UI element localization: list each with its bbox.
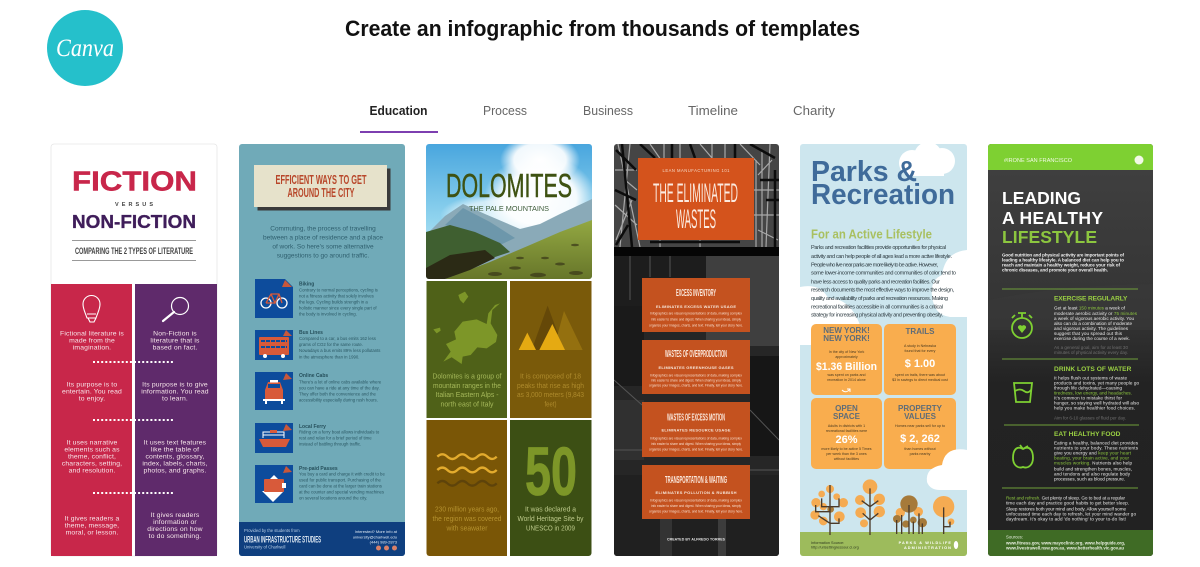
item: biking: the legs. Cycling builds strength in a xyxy=(299,300,368,304)
section: eat healthy food: EAT HEALTHY FOOD xyxy=(1054,431,1121,438)
stat card: new york: was spent on parks and xyxy=(828,373,865,377)
section: exercise regularly: Get at least 150 minutes a week of xyxy=(1054,306,1126,310)
card: wastes of excess motion: WASTES OF EXCESS MOTION xyxy=(667,412,725,424)
item: pre-paid passes: used for public transport. Purchasing of the xyxy=(299,478,382,482)
section: drink lots of water: It helps flush out systems of waste xyxy=(1054,376,1127,380)
section: exercise regularly: suggest that you spread out this xyxy=(1054,331,1123,336)
card: excess inventory xyxy=(642,278,750,332)
item: pre-paid passes xyxy=(255,465,385,503)
text: non-fiction column: to learn. xyxy=(162,396,188,402)
section: exercise regularly: and vigorous activity. The guidelines xyxy=(1054,326,1129,331)
text: fiction column: Fictional literature is xyxy=(60,330,124,338)
tile: mountain peaks: peaks that rise as high xyxy=(517,381,584,390)
item: online cabs xyxy=(255,372,382,410)
item: bus lines: in the atmosphere than in 1990. xyxy=(299,354,359,360)
body text: Parks and recreation facilities provide opportunities for physical xyxy=(811,245,946,251)
closing paragraph: unfocussed time each day to refresh, let your mind wander go xyxy=(1006,512,1136,516)
body text: some lower-income communities and communities of color tend to xyxy=(811,271,956,277)
stat card: open space: per week than the 3 ones xyxy=(826,452,867,456)
body text: research documents the most effective ways to improve the design, xyxy=(811,288,954,294)
footer: Provided by the students from xyxy=(244,528,300,533)
stat card: open space: without facilities xyxy=(834,457,859,461)
text: non-fiction column: information. You read xyxy=(141,388,209,396)
tile: fifty years: 50 xyxy=(525,433,577,510)
item: online cabs: Online Cabs xyxy=(299,373,328,379)
panel: the eliminated wastes: THE ELIMINATED xyxy=(653,178,738,208)
banner heading xyxy=(254,165,390,210)
stat card: trails: $3 in savings to direct medical cost xyxy=(892,378,948,382)
intro text: Commuting, the process of travelling xyxy=(270,226,376,232)
intro text: suggestions to go around traffic. xyxy=(277,252,369,260)
panel: leading a healthy lifestyle xyxy=(988,144,1153,556)
subheading: For an Active Lifestyle xyxy=(811,226,932,242)
location label: #IRONE SAN FRANCISCO xyxy=(1004,158,1073,164)
section: drink lots of water: tiredness, low energy, and headaches. xyxy=(1054,390,1132,396)
stat card: trails: spent on trails, there was about xyxy=(895,373,945,377)
item: pre-paid passes: Pre-paid Passes xyxy=(299,466,338,472)
card: wastes of excess motion: Infographics are visual representations of data, making complex xyxy=(650,436,742,440)
section: exercise regularly: moderate aerobic activity or 75 minutes xyxy=(1054,311,1138,316)
intro paragraph xyxy=(1002,252,1124,272)
closing paragraph: daydream. It's okay to add 'do nothing' to your to-do list! xyxy=(1006,516,1126,522)
card: wastes of excess motion: info easier to share and digest. When sharing your ideas, simply xyxy=(651,442,741,446)
item: bus lines: grams of CO2 for the same route. xyxy=(299,342,363,347)
card: transportation and waiting: TRANSPORTATION & WAITING xyxy=(665,475,727,486)
item: pre-paid passes: at the counter and special vending machines xyxy=(299,490,384,494)
header bar xyxy=(988,144,1153,170)
card: wastes of excess motion xyxy=(642,402,750,457)
stat card: property values: than homes without xyxy=(904,447,936,451)
tile: seawater waves: with seawater xyxy=(446,524,488,532)
item: local ferry: instead of battling through traffic. xyxy=(299,442,361,446)
card: excess inventory: organize your images, charts, and text. Finally, tell your story here. xyxy=(649,324,743,328)
text: non-fiction column: Its purpose is to give xyxy=(142,382,208,388)
panel: parks and recreation: Recreation xyxy=(811,179,955,211)
text: non-fiction column: index, labels, charts, xyxy=(142,460,208,468)
heading: A HEALTHY xyxy=(1002,208,1103,228)
tile: mountain peaks: feet) xyxy=(544,400,557,408)
item: online cabs: There's a lot of online cabs available where xyxy=(299,380,382,384)
header block: WASTES xyxy=(676,204,716,234)
closing paragraph: Sleep restores both your mind and body. Allow yourself some xyxy=(1006,506,1126,512)
section: eat healthy food: give you energy and keep your heart xyxy=(1054,450,1132,456)
text: non-fiction column: photos, and graphs. xyxy=(144,468,206,474)
cloud: top right xyxy=(899,142,955,176)
header block: LEAN MANUFACTURING 101 xyxy=(662,168,730,173)
text: fiction column: It uses narrative xyxy=(67,440,118,446)
footer bar xyxy=(988,530,1153,556)
panel: efficient ways to get around the city xyxy=(239,144,405,556)
section: eat healthy food: muscles working. Nutrients also help xyxy=(1054,460,1132,466)
administration label: PARKS & WILDLIFE xyxy=(899,541,952,545)
stat card: open space: Adults in districts with 1 xyxy=(828,424,865,428)
stat card: property values: $ 2, 262 xyxy=(900,433,940,445)
panel: the eliminated wastes xyxy=(614,144,779,556)
footer: (444) 989-2873 xyxy=(370,540,398,544)
stat card: new york: In the city of New York xyxy=(829,350,864,354)
intro paragraph: Good nutrition and physical activity are important points of xyxy=(1002,252,1124,258)
card: transportation and waiting: Infographics are visual representations of data, making complex xyxy=(650,498,742,502)
section: drink lots of water: Aim for 6-10 glasses of fluid per day. xyxy=(1054,416,1126,420)
heading: LEADING xyxy=(1002,188,1081,208)
item: online cabs: you can have a ride at any time of the day. xyxy=(299,386,380,390)
logo: Canva: Canva xyxy=(56,35,114,62)
text: non-fiction column: like the table of xyxy=(151,446,199,454)
tile: map of europe: Dolomites is a group of xyxy=(432,372,502,380)
tile: fifty years: It was declared a xyxy=(525,504,577,514)
body text: People who live near parks are more likely to be active. However, xyxy=(811,262,938,268)
stat card: open space: more likely to be active 5 Times xyxy=(821,447,872,451)
card: wastes of excess motion: ELIMINATES RESOURCE USAGE xyxy=(662,428,731,432)
section: eat healthy food: processes, such as blood pressure. xyxy=(1054,476,1125,482)
text: non-fiction column: It uses text features xyxy=(144,440,207,446)
item: local ferry: rest and relax for a brief period of time xyxy=(299,436,372,440)
section: drink lots of water: help you make healthier food choices. xyxy=(1054,406,1135,410)
stat card: trails xyxy=(884,324,956,395)
section: eat healthy food xyxy=(1013,431,1139,482)
icon: apple xyxy=(1013,445,1033,468)
credit: CREATED BY ALFREDO TORRES xyxy=(667,538,726,542)
icon: light bulb xyxy=(83,296,100,322)
intro text: between a place of residence and a place xyxy=(263,234,383,242)
section: drink lots of water: DRINK LOTS OF WATER xyxy=(1054,366,1132,373)
intro text: of work. So here's some alternative xyxy=(272,244,374,250)
heading: LIFESTYLE xyxy=(1002,227,1097,247)
cloud: right xyxy=(932,250,967,317)
item: biking: not a fitness activity that solely involves xyxy=(299,294,374,298)
card: wastes of overproduction: Infographics are visual representations of data, making complex xyxy=(650,374,742,378)
versus label: VERSUS xyxy=(115,202,153,208)
tile: fifty years: World Heritage Site by xyxy=(518,514,584,523)
text: fiction column: to enjoy. xyxy=(79,396,105,402)
heading: Parks & xyxy=(811,156,917,188)
icon: glass of water xyxy=(1014,383,1032,402)
text: non-fiction column: based on fact. xyxy=(153,344,197,352)
subheading: THE PALE MOUNTAINS xyxy=(469,204,549,213)
stat card: new york: $1.36 Billion xyxy=(816,361,877,373)
item: bus lines: Compared to a car, a bus emits 162 less xyxy=(299,336,376,341)
stat card: open space: SPACE xyxy=(833,412,861,421)
body text: quality and availability of parks and recreation resources. Making xyxy=(811,296,948,302)
text: fiction column: It gives readers a xyxy=(65,516,119,522)
administration label xyxy=(899,541,958,550)
text: non-fiction column xyxy=(141,330,209,540)
card: transportation and waiting: organize your images, charts, and text. Finally, tell your story here. xyxy=(649,510,743,514)
section: exercise regularly: a week of vigorous aerobic activity. You xyxy=(1054,316,1134,321)
section: exercise regularly: EXERCISE REGULARLY xyxy=(1054,296,1128,303)
closing paragraph: time each day and practice good habits to get better sleep. xyxy=(1006,500,1129,506)
section: eat healthy food: nutrients to your body. These nutrients xyxy=(1054,446,1139,450)
intro paragraph: leading a healthy lifestyle. A balanced diet can help you to xyxy=(1002,258,1124,262)
item: online cabs: They offer both the convenience and the xyxy=(299,392,376,396)
body text: have less access to quality parks and recreation facilities. Our xyxy=(811,279,940,285)
text: fiction column: characters, setting, xyxy=(62,460,122,468)
stat card: open space xyxy=(811,398,882,469)
stat card: property values: VALUES xyxy=(904,412,937,421)
cloud: left xyxy=(800,286,860,345)
tile: seawater waves: the region was covered xyxy=(432,514,502,523)
category tabs xyxy=(360,103,835,133)
text: fiction column: Its purpose is to xyxy=(67,382,117,388)
text: non-fiction column: information or xyxy=(153,519,197,526)
intro paragraph: reach and maintain a healthy weight, reduce your risk of xyxy=(1002,262,1120,268)
sources xyxy=(1005,534,1125,550)
text: fiction column: entertain. You read xyxy=(62,388,122,396)
source note xyxy=(811,541,859,550)
category tabs: Timeline xyxy=(688,103,738,118)
text: fiction column xyxy=(60,330,124,536)
text: fiction column: imagination. xyxy=(73,344,111,352)
panel: parks and recreation xyxy=(800,142,967,556)
item: pre-paid passes: on several locations around the city. xyxy=(299,496,367,500)
card: transportation and waiting: ELIMINATES POLLUTION & RUBBISH xyxy=(656,490,737,495)
footer xyxy=(239,522,405,556)
card: wastes of overproduction: ELIMINATES GREENHOUSE GASES xyxy=(658,365,734,370)
intro paragraph: chronic diseases, and promote your overall health. xyxy=(1002,268,1108,272)
category tabs: Education xyxy=(370,103,428,118)
item: local ferry xyxy=(255,423,380,453)
closing paragraph xyxy=(1006,496,1136,522)
tile: fifty years: UNESCO in 2009 xyxy=(526,524,575,532)
stat card: property values: PROPERTY xyxy=(898,404,943,413)
text: fiction column: elements such as xyxy=(64,446,120,454)
card: wastes of overproduction xyxy=(642,340,750,394)
panel: dolomites xyxy=(426,134,596,556)
item: biking: holistic manner since every single part of xyxy=(299,306,377,310)
card: transportation and waiting: info easier to share and digest. When sharing your ideas, simply xyxy=(651,504,741,508)
title: Create an infographic from thousands of templates xyxy=(345,16,860,41)
icon: trees xyxy=(810,479,954,535)
item: local ferry: Riding on a ferry boat allows individuals to xyxy=(299,430,380,434)
stat card: open space: recreational facilities were xyxy=(826,429,867,433)
tile: mountain peaks: as 3,000 meters (9,843 xyxy=(517,390,584,399)
card: wastes of excess motion: organize your images, charts, and text. Finally, tell your story here. xyxy=(649,448,743,452)
section: drink lots of water xyxy=(1014,366,1139,420)
footer: Interested? More info at xyxy=(355,529,398,534)
body text: strategy for increasing physical activity and preventing obesity. xyxy=(811,313,943,319)
section: exercise regularly xyxy=(1012,296,1138,355)
badge xyxy=(1134,156,1144,164)
source note: http://urlsettingressour.ci.org xyxy=(811,546,859,550)
icon: magnifier xyxy=(163,298,188,321)
text: non-fiction column: Non-Fiction is xyxy=(153,330,197,338)
banner heading: AROUND THE CITY xyxy=(288,185,355,200)
heading: DOLOMITES xyxy=(446,167,572,204)
footer: university@charlwell.edu xyxy=(353,534,397,540)
footer: URBAN INFRASTRUCTURE STUDIES xyxy=(244,534,321,544)
photo: mountains xyxy=(426,134,596,279)
section: drink lots of water: It's common to mistake thirst for xyxy=(1054,396,1122,400)
sources: Sources: xyxy=(1006,534,1023,540)
item: biking: Biking xyxy=(299,282,314,288)
item: online cabs: accessibility especially during rush hours. xyxy=(299,398,378,402)
stat card: new york: approximately xyxy=(835,355,858,359)
card: excess inventory: Infographics are visual representations of data, making complex xyxy=(650,312,742,316)
category tabs: Charity xyxy=(793,103,835,118)
text: non-fiction column: It gives readers xyxy=(151,512,200,519)
body text: recreational facilities accessible in all communities is a critical xyxy=(811,304,943,310)
icon: stopwatch xyxy=(1012,313,1032,338)
photo: industrial background xyxy=(614,144,779,556)
stat card: new york xyxy=(811,324,882,395)
banner heading: EFFICIENT WAYS TO GET xyxy=(276,172,367,187)
tile: map of europe: north east of Italy xyxy=(440,400,494,408)
item: biking: Contrary to normal perceptions, cycling is xyxy=(299,288,378,292)
header block xyxy=(638,158,754,240)
item: bus lines: Bus Lines xyxy=(299,330,323,336)
heading: non-fiction: NON-FICTION xyxy=(72,212,196,232)
sources: www.fitness.gov, www.mayoclinic.org, www.helpguide.org, xyxy=(1005,540,1125,546)
category tabs: Business xyxy=(583,103,633,118)
stat card: new york: NEW YORK! xyxy=(823,326,870,335)
heading: fiction: FICTION xyxy=(72,166,197,196)
logo: Canva xyxy=(47,10,123,86)
card: transportation and waiting xyxy=(642,465,750,519)
source note: Information Source: xyxy=(811,541,844,545)
ground xyxy=(800,532,967,556)
section: eat healthy food: build and strengthen bones, muscles, xyxy=(1054,466,1132,472)
category tabs: Process xyxy=(483,103,527,118)
text: fiction column: moral, or lesson. xyxy=(66,530,118,536)
stat card: property values xyxy=(884,398,956,469)
card: excess inventory: ELIMINATES EXCESS WATER USAGE xyxy=(656,304,736,309)
stat card: trails: TRAILS xyxy=(906,327,935,336)
section: eat healthy food: Eating a healthy, balanced diet provides xyxy=(1054,440,1139,446)
item: pre-paid passes: card can be done at the larger train stations xyxy=(299,484,382,488)
item: bus lines: Nowadays a bus emits 89% less pollutants xyxy=(299,348,380,353)
heading xyxy=(1002,188,1103,247)
section: eat healthy food: and tendons and also regulate body xyxy=(1054,472,1131,476)
closing paragraph: Rest and refresh. Get plenty of sleep. Go to bed at a regular xyxy=(1006,496,1125,500)
card: wastes of overproduction: WASTES OF OVERPRODUCTION xyxy=(665,349,727,360)
tile: map of europe: Italian Eastern Alps - xyxy=(436,390,499,399)
text: non-fiction column: directions on how xyxy=(147,526,203,533)
body text: activity and can help people of all ages lead a more active lifestyle. xyxy=(811,254,952,260)
stat card: new york: NEW YORK! xyxy=(823,334,870,343)
text: fiction column: theme, message, xyxy=(65,522,119,530)
column: fiction xyxy=(51,284,132,556)
tile: seawater waves xyxy=(426,420,507,556)
section: exercise regularly: also can do a combination of moderate xyxy=(1054,321,1132,326)
footer: University of Charlwell xyxy=(244,544,285,550)
subtitle: COMPARING THE 2 TYPES OF LITERATURE xyxy=(75,246,193,257)
text: non-fiction column: literature that is xyxy=(150,338,200,344)
section: exercise regularly: exercise during the course of a week. xyxy=(1054,336,1130,341)
column: non-fiction xyxy=(135,284,217,556)
tile: map of europe xyxy=(426,281,507,418)
item: local ferry: Local Ferry xyxy=(299,424,326,430)
stat card: trails: found that for every xyxy=(905,349,936,353)
panel: fiction versus non-fiction xyxy=(51,144,217,556)
text: non-fiction column: to do something. xyxy=(149,533,201,540)
cloud: bottom right xyxy=(927,449,967,490)
tile: mountain peaks: It is composed of 18 xyxy=(520,372,581,380)
tile: fifty years xyxy=(510,420,592,556)
intro text xyxy=(263,226,383,260)
section: drink lots of water: products and toxins, yet many people go xyxy=(1054,380,1139,386)
text: fiction column: and resolution. xyxy=(69,468,115,474)
section: drink lots of water: through life dehydrated—causing xyxy=(1054,386,1122,390)
section: eat healthy food: beating, your brain active, and your xyxy=(1054,456,1129,460)
item: biking: the body is involved in cycling. xyxy=(299,312,357,316)
section: exercise regularly: As a general goal, aim for at least 30 xyxy=(1054,345,1128,350)
stat card: new york: recreation in 2014 alone xyxy=(827,378,866,382)
card: wastes of overproduction: info easier to share and digest. When sharing your ideas, simply xyxy=(651,378,741,382)
section: exercise regularly: minutes of physical activity every day. xyxy=(1054,350,1128,355)
tile: map of europe: mountain ranges in the xyxy=(433,381,501,390)
item: bus lines xyxy=(255,330,380,360)
stat card: open space: 26% xyxy=(835,434,858,446)
text: non-fiction column: contents, glossary, xyxy=(145,454,205,460)
card: excess inventory: info easier to share and digest. When sharing your ideas, simply xyxy=(651,318,741,322)
administration label: ADMINISTRATION xyxy=(904,546,952,550)
text: fiction column: made from the xyxy=(69,338,115,344)
stat card: open space: OPEN xyxy=(835,404,858,413)
body text xyxy=(811,245,956,319)
card: wastes of overproduction: organize your images, charts, and text. Finally, tell your story here. xyxy=(649,384,743,388)
tile: mountain peaks xyxy=(510,281,592,418)
stat card: property values: Homes near parks sell for up to xyxy=(895,424,945,428)
section: drink lots of water: hunger, so staying well hydrated will also xyxy=(1054,400,1139,406)
card: excess inventory: EXCESS INVENTORY xyxy=(676,288,716,299)
stat card: property values: parks nearby xyxy=(910,452,931,456)
sources: www.livestrawell.nsw.gov.au, www.betterhealth.vic.gov.au xyxy=(1005,546,1124,550)
stat card: trails: A study in Nebraska xyxy=(904,344,936,348)
stat card: trails: $ 1.00 xyxy=(905,358,935,370)
item: biking xyxy=(255,279,378,318)
item: pre-paid passes: You buy a card and charge it with credit to be xyxy=(299,472,385,476)
tile: seawater waves: 230 million years ago, xyxy=(435,504,499,514)
text: fiction column: theme, conflict, xyxy=(68,454,116,460)
